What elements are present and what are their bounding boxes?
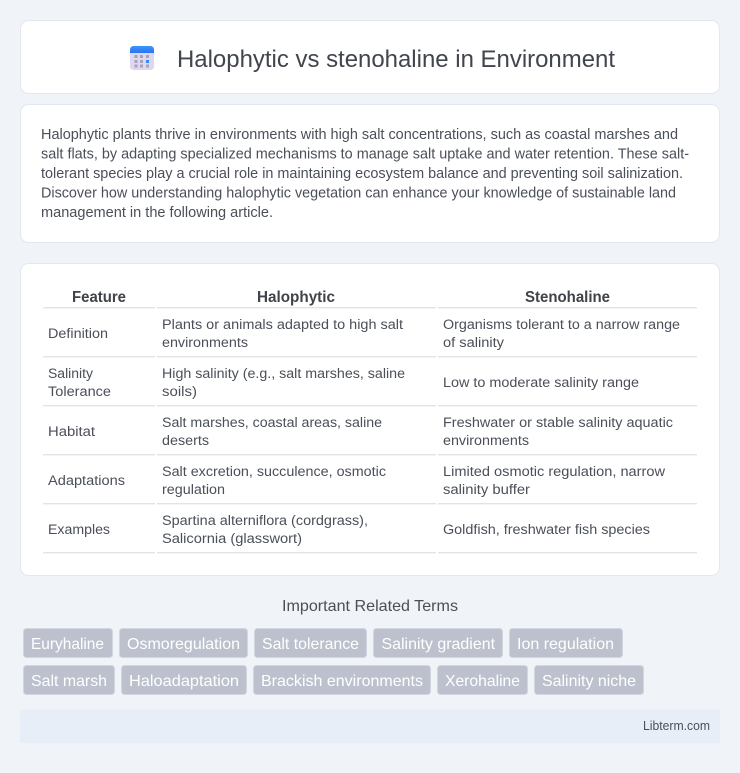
table row: examples: Spartina alterniflora (cordgrass), bbox=[162, 513, 368, 529]
heading: important related terms: Important Related Terms bbox=[282, 598, 458, 615]
table row: definition: Definition bbox=[48, 326, 108, 342]
table row: examples: Salicornia (glasswort) bbox=[162, 531, 302, 547]
table row: habitat: Freshwater or stable salinity aquatic bbox=[443, 415, 673, 431]
table row: salinity tolerance bbox=[48, 366, 639, 400]
tags: related terms: Salt marsh bbox=[31, 673, 107, 690]
table row: habitat: Salt marshes, coastal areas, saline bbox=[162, 415, 382, 431]
footer bar bbox=[20, 710, 720, 743]
table row: habitat: environments bbox=[443, 433, 529, 449]
tags: related terms: Brackish environments bbox=[261, 673, 423, 690]
table row: habitat: deserts bbox=[162, 433, 209, 449]
icon: calendar bbox=[130, 46, 154, 70]
title: Halophytic vs stenohaline in Environment bbox=[177, 46, 615, 73]
table row: definition: of salinity bbox=[443, 335, 505, 351]
tags: related terms: Osmoregulation bbox=[127, 636, 240, 653]
text block: introduction paragraph: Halophytic plants thrive in environments with high salt concentrations, such as coastal marshes and bbox=[41, 127, 678, 143]
table row: habitat bbox=[48, 415, 673, 449]
text block: introduction paragraph: tolerant species play a crucial role in maintaining ecosystem balance and preventing soil salinization. bbox=[41, 166, 683, 182]
table row: examples: Examples bbox=[48, 522, 110, 538]
table row: adaptations: salinity buffer bbox=[443, 482, 530, 498]
panel: comparison table bbox=[20, 264, 720, 576]
table row: adaptations: Salt excretion, succulence, osmotic bbox=[162, 464, 386, 480]
table header row: Feature bbox=[72, 289, 126, 306]
table row: definition: environments bbox=[162, 335, 248, 351]
table row: adaptations: Limited osmotic regulation, narrow bbox=[443, 464, 666, 480]
table row: examples bbox=[48, 513, 650, 547]
table header row bbox=[72, 289, 610, 306]
table row: definition: Plants or animals adapted to high salt bbox=[162, 317, 403, 333]
panel: title header bbox=[20, 20, 720, 94]
table row: examples: Goldfish, freshwater fish species bbox=[443, 522, 650, 538]
tags: related terms bbox=[24, 628, 644, 694]
tags: related terms: Euryhaline bbox=[31, 636, 104, 653]
table row: salinity tolerance: Low to moderate salinity range bbox=[443, 375, 639, 391]
tags: related terms: Xerohaline bbox=[445, 673, 520, 690]
table header row: Stenohaline bbox=[525, 289, 610, 306]
text block: introduction paragraph: management in the following article. bbox=[41, 205, 273, 221]
tags: related terms: Salt tolerance bbox=[262, 636, 359, 653]
table row: adaptations: regulation bbox=[162, 482, 225, 498]
table row: adaptations: Adaptations bbox=[48, 473, 125, 489]
tags: related terms: Ion regulation bbox=[517, 636, 614, 653]
table row: definition: Organisms tolerant to a narrow range bbox=[443, 317, 680, 333]
footer source text: Libterm.com bbox=[643, 719, 710, 733]
table row: salinity tolerance: soils) bbox=[162, 384, 197, 400]
table row: adaptations bbox=[48, 464, 666, 498]
text block: introduction paragraph bbox=[41, 127, 689, 221]
text block: introduction paragraph: Discover how understanding halophytic vegetation can enhance your knowledge of sustainable land bbox=[41, 186, 676, 202]
table header row: Halophytic bbox=[257, 289, 335, 306]
text block: introduction paragraph: salt flats, by adapting specialized mechanisms to manage salt uptake and water retention. These salt- bbox=[41, 146, 689, 162]
table row: definition bbox=[48, 317, 680, 351]
tags: related terms: Haloadaptation bbox=[129, 673, 239, 690]
tags: related terms: Salinity gradient bbox=[382, 636, 496, 653]
panel: introduction bbox=[20, 104, 720, 242]
table row: salinity tolerance: Tolerance bbox=[48, 384, 111, 400]
table row: salinity tolerance: Salinity bbox=[48, 366, 94, 382]
table row: salinity tolerance: High salinity (e.g., salt marshes, saline bbox=[162, 366, 405, 382]
table row: habitat: Habitat bbox=[48, 424, 95, 440]
tags: related terms: Salinity niche bbox=[542, 673, 636, 690]
